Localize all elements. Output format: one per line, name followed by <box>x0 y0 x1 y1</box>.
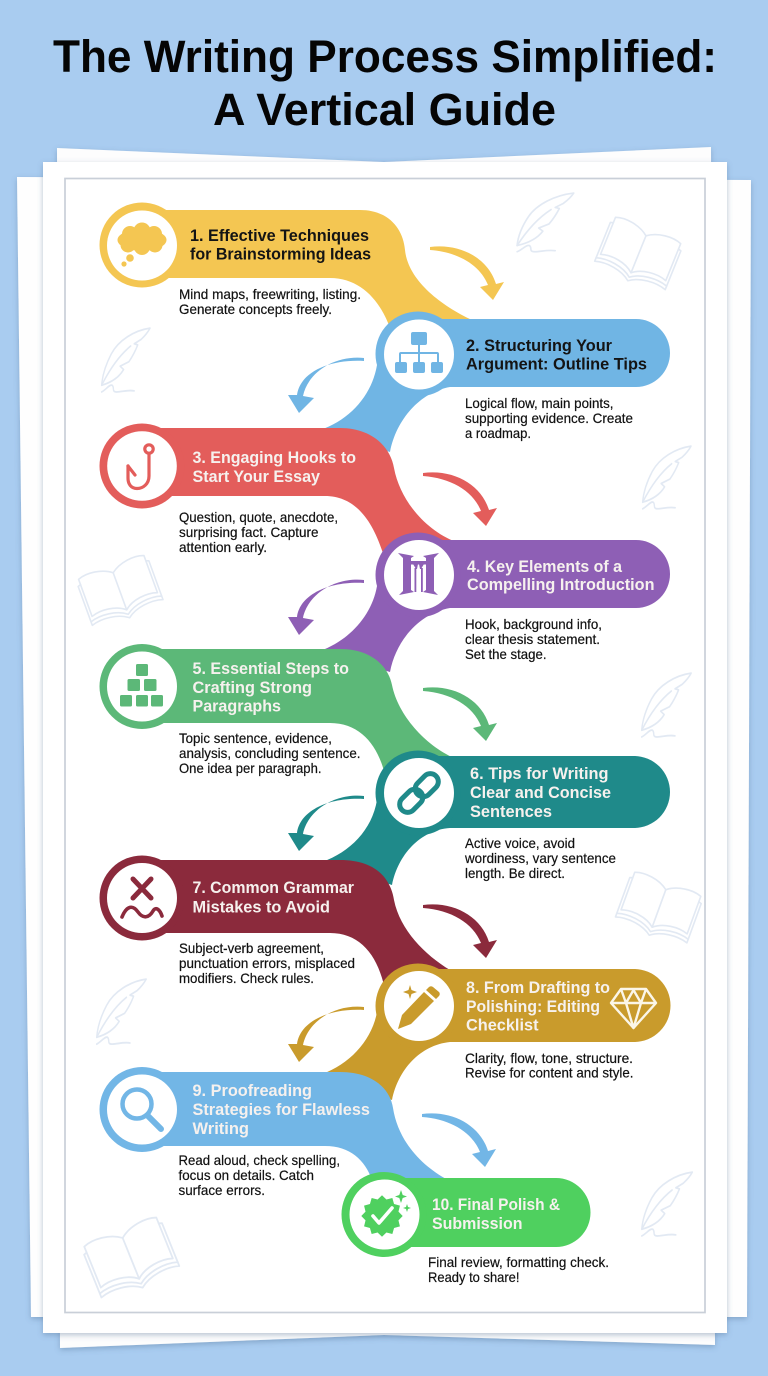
arrow 7 <box>423 904 497 958</box>
step 9 text: focus on details. Catch <box>178 1167 314 1183</box>
decorative feathers and books <box>75 193 704 1303</box>
step 1 text: Mind maps, freewriting, listing. <box>179 286 361 302</box>
arrow 4 <box>288 580 364 635</box>
step 6 text: Active voice, avoid <box>465 835 575 851</box>
step 6 badge <box>376 750 460 836</box>
arrow 2 <box>288 358 364 413</box>
step 2 badge <box>376 312 460 396</box>
step 5 title: Crafting Strong <box>192 678 312 697</box>
step 1 text: Generate concepts freely. <box>179 301 332 317</box>
step 4 text: Hook, background info, <box>465 616 602 632</box>
step 6 title: Sentences <box>470 802 552 821</box>
step 3 title <box>192 448 356 486</box>
step 5 title <box>192 659 349 716</box>
step 2 title <box>466 336 647 374</box>
icon: chain link <box>396 770 442 816</box>
step 7 text <box>179 940 355 986</box>
step 9 badge <box>100 1067 184 1152</box>
step 2 text <box>465 395 633 441</box>
step 6 title: Clear and Concise <box>470 783 611 802</box>
step 8 title: Polishing: Editing <box>466 997 600 1016</box>
step 9 title <box>192 1081 370 1138</box>
icon: diamond <box>611 989 656 1028</box>
step 3 text: surprising fact. Capture <box>179 524 319 540</box>
step 7 title: Mistakes to Avoid <box>192 898 330 916</box>
step 9 title: Writing <box>192 1119 249 1138</box>
step 6 title: 6. Tips for Writing <box>470 764 608 783</box>
step 4 text: clear thesis statement. <box>465 631 600 647</box>
step 10 badge <box>342 1172 426 1257</box>
step 3 band <box>100 424 456 560</box>
step 4 text <box>465 616 602 662</box>
step 4 badge <box>376 532 460 618</box>
step 8 band <box>322 964 670 1100</box>
step 7 badge <box>100 856 184 940</box>
arrow 1 <box>430 246 504 300</box>
step 5 text: Topic sentence, evidence, <box>179 730 332 746</box>
step 3 text: Question, quote, anecdote, <box>179 509 338 525</box>
icon: thought cloud <box>118 222 166 267</box>
step 10 title: 10. Final Polish & <box>432 1195 560 1214</box>
step 2 text: Logical flow, main points, <box>465 395 614 411</box>
step 3 text: attention early. <box>179 539 267 555</box>
title: A Vertical Guide <box>213 84 556 135</box>
step 1 title <box>190 226 371 264</box>
step 9 text: surface errors. <box>178 1182 265 1198</box>
icon: magnifying glass <box>122 1090 161 1129</box>
step 7 text: punctuation errors, misplaced <box>179 955 355 971</box>
step 7 title: 7. Common Grammar <box>192 878 354 897</box>
step 4 title: 4. Key Elements of a <box>467 557 623 576</box>
arrow 3 <box>423 472 497 526</box>
step 8 text <box>465 1050 634 1080</box>
step 10 text: Final review, formatting check. <box>428 1254 609 1270</box>
step 1 band <box>100 202 472 328</box>
icon: block pyramid <box>120 664 163 706</box>
step 9 band <box>100 1067 448 1180</box>
step 3 title: 3. Engaging Hooks to <box>192 448 356 467</box>
arrow 5 <box>423 687 497 741</box>
step 10 title: Submission <box>432 1214 522 1233</box>
arrow 8 <box>288 1007 364 1062</box>
step 8 text: Revise for content and style. <box>465 1064 634 1080</box>
step 5 title: Paragraphs <box>192 696 281 716</box>
step 5 badge <box>100 644 184 729</box>
title: The Writing Process Simplified: <box>53 31 717 82</box>
step 3 text <box>179 509 338 555</box>
step 5 text: analysis, concluding sentence. <box>179 745 360 761</box>
step 5 band <box>100 644 454 775</box>
step 2 band <box>320 312 670 452</box>
step 1 title: 1. Effective Techniques <box>190 226 369 245</box>
step 7 title <box>192 878 354 916</box>
step 5 text: One idea per paragraph. <box>179 760 322 776</box>
step 4 band <box>320 532 670 672</box>
step 8 title: Checklist <box>466 1016 539 1034</box>
step 10 text <box>428 1254 609 1285</box>
step 8 title: 8. From Drafting to <box>466 978 610 997</box>
step 10 title <box>432 1195 560 1233</box>
step 8 title <box>466 978 610 1034</box>
icon: gateway <box>398 553 439 595</box>
step 6 text: length. Be direct. <box>465 865 565 881</box>
step 4 title <box>467 557 654 594</box>
title <box>53 31 717 135</box>
icon: cross and squiggle <box>122 879 162 917</box>
step 5 text <box>179 730 360 776</box>
step 6 title <box>470 764 611 821</box>
step 5 title: 5. Essential Steps to <box>192 659 349 678</box>
step 10 band <box>342 1172 590 1257</box>
step 8 text: Clarity, flow, tone, structure. <box>465 1050 633 1066</box>
step 7 band <box>100 856 450 990</box>
step 2 title: Argument: Outline Tips <box>466 354 647 374</box>
step 9 title: 9. Proofreading <box>192 1081 312 1100</box>
icon: fish hook <box>128 445 153 488</box>
step 6 band <box>322 750 670 885</box>
step 4 title: Compelling Introduction <box>467 575 654 594</box>
icon: org chart <box>395 332 443 373</box>
step 8 badge <box>376 964 460 1048</box>
step 10 text: Ready to share! <box>428 1269 520 1285</box>
step 3 title: Start Your Essay <box>192 467 321 486</box>
step 2 text: a roadmap. <box>465 425 531 441</box>
arrow 6 <box>288 796 364 851</box>
icon: pencil and sparkle <box>398 985 440 1029</box>
step 6 text: wordiness, vary sentence <box>464 850 616 866</box>
step 9 text <box>178 1152 340 1198</box>
step 3 badge <box>100 424 184 508</box>
step 1 title: for Brainstorming Ideas <box>190 244 371 264</box>
step 1 badge <box>100 202 184 288</box>
step 2 text: supporting evidence. Create <box>465 410 633 426</box>
step 9 title: Strategies for Flawless <box>192 1100 370 1119</box>
arrow 9 <box>422 1113 496 1167</box>
step 7 text: modifiers. Check rules. <box>179 970 314 986</box>
icon: verified badge <box>361 1190 411 1237</box>
step 6 text <box>464 835 616 881</box>
step 4 text: Set the stage. <box>465 646 546 662</box>
step 9 text: Read aloud, check spelling, <box>178 1152 340 1168</box>
step 2 title: 2. Structuring Your <box>466 336 612 355</box>
step 7 text: Subject-verb agreement, <box>179 940 324 956</box>
step 1 text <box>179 286 361 317</box>
